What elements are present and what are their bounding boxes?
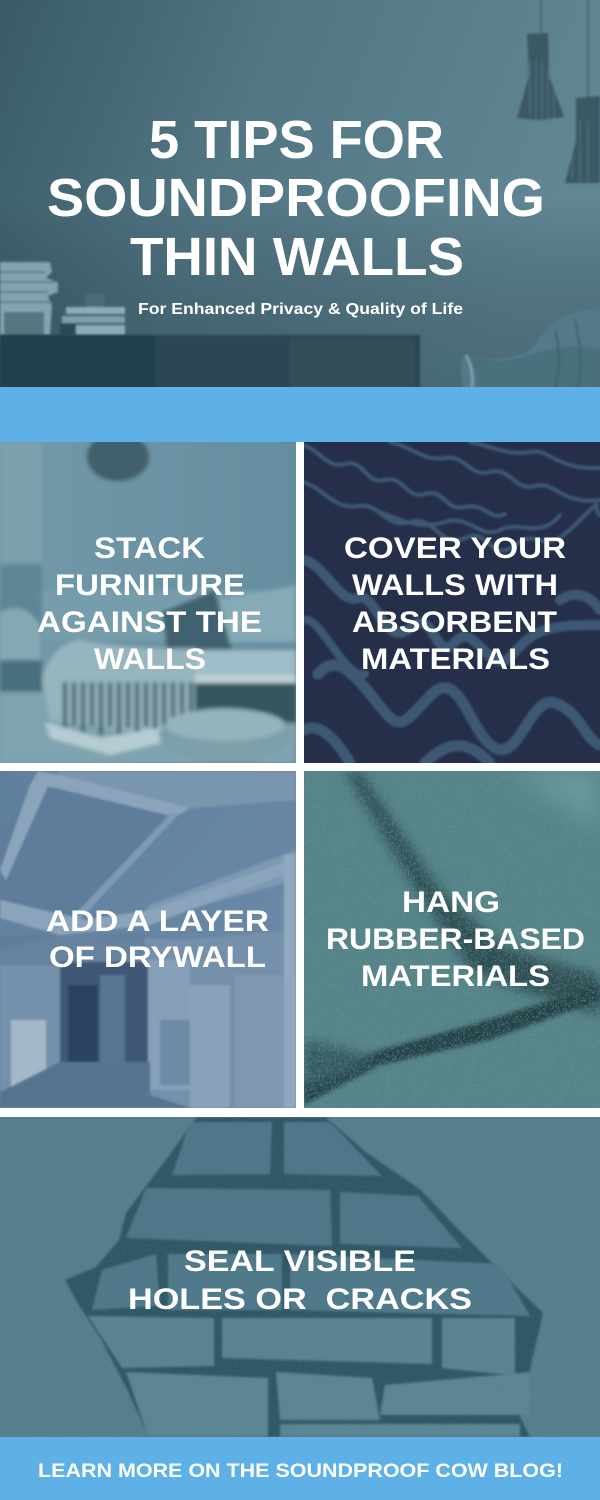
label: cover walls: ABSORBENT <box>352 606 557 639</box>
image: pendant lamps <box>517 0 600 183</box>
title <box>47 110 545 287</box>
label: stack furniture: FURNITURE <box>55 569 245 602</box>
label: cover walls: MATERIALS <box>361 643 550 676</box>
label: hang rubber: HANG <box>402 886 500 919</box>
title: 5 TIPS FOR <box>149 110 444 170</box>
image: armchair <box>461 309 600 388</box>
label: stack furniture: AGAINST THE <box>37 606 262 639</box>
label: seal holes <box>128 1245 472 1316</box>
label: stack furniture: WALLS <box>94 643 206 676</box>
label: cover walls <box>344 532 566 676</box>
image: woven fabric folds <box>304 771 600 1108</box>
label: cover walls: WALLS WITH <box>352 569 558 602</box>
label: stack furniture <box>37 532 262 676</box>
label: cover walls: COVER YOUR <box>344 532 566 565</box>
label: add drywall: ADD A LAYER <box>46 905 269 938</box>
image: dark sideboard <box>0 335 420 388</box>
panel: stack furniture <box>0 442 296 763</box>
panel: seal holes <box>0 1117 600 1437</box>
label: stack furniture: STACK <box>94 532 205 565</box>
subtitle: For Enhanced Privacy & Quality of Life <box>138 301 463 318</box>
panel: hang rubber <box>304 771 600 1108</box>
title: THIN WALLS <box>130 227 464 287</box>
label: seal holes: SEAL VISIBLE <box>184 1245 416 1278</box>
image: exposed brick hole <box>0 1117 600 1438</box>
panel: cover walls <box>304 442 600 763</box>
title: SOUNDPROOFING <box>47 168 545 228</box>
image: acoustic foam waves <box>300 442 600 763</box>
label: hang rubber: MATERIALS <box>361 960 550 993</box>
label: hang rubber: RUBBER-BASED <box>326 923 585 956</box>
label: add drywall: OF DRYWALL <box>49 941 266 974</box>
hero banner <box>0 0 600 387</box>
label: hang rubber <box>326 886 585 993</box>
image: drywall room <box>0 771 296 1108</box>
panel: add drywall <box>0 771 296 1108</box>
footer link text: LEARN MORE ON THE SOUNDPROOF COW BLOG! <box>38 1461 563 1482</box>
image: stacked books <box>0 262 125 335</box>
label: seal holes: HOLES OR CRACKS <box>128 1283 472 1316</box>
blue band <box>0 387 600 442</box>
label: add drywall <box>46 905 269 974</box>
footer bar <box>0 1437 600 1500</box>
image: bedroom scene <box>0 433 296 763</box>
